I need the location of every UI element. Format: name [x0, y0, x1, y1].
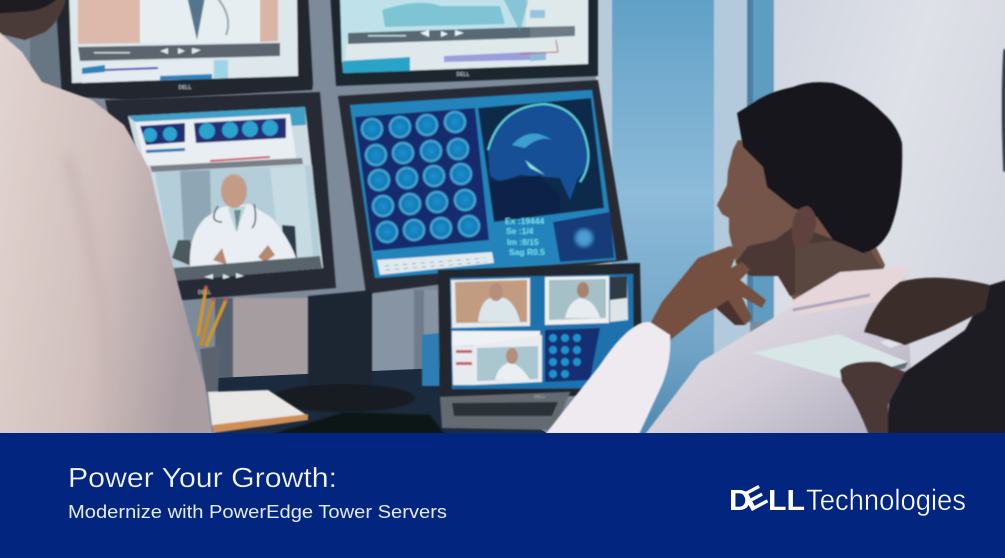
man in lab coat	[540, 82, 915, 441]
man: arm sleeve	[540, 322, 670, 441]
scan readout: Sag R0.5	[509, 247, 545, 257]
Dell Technologies logo: Technologies	[806, 484, 966, 517]
Dell Technologies logo	[729, 480, 966, 518]
banner	[0, 433, 1005, 558]
tablet	[752, 334, 908, 380]
back of head	[0, 0, 68, 40]
scan readout: Se :1/4	[506, 226, 534, 236]
scan readout	[505, 216, 545, 257]
Dell Technologies logo: LL	[768, 485, 805, 517]
man: ear	[792, 206, 816, 250]
man: hair	[737, 82, 902, 253]
top-right monitor	[330, 0, 598, 86]
scan readout: Ex :19444	[505, 216, 544, 226]
man: body coat	[640, 268, 915, 441]
photo: medical team at monitors	[0, 0, 1005, 441]
laptop label: DELL	[534, 394, 546, 399]
scan readout: Im :8/15	[507, 237, 539, 247]
desk items: cup, pencils, papers, keyboard	[198, 286, 450, 441]
lower hand	[840, 362, 905, 441]
background wall and window	[0, 0, 1005, 441]
monitor stand	[271, 290, 415, 412]
foreground person: tablet and hands	[752, 278, 1005, 441]
banner title: Power Your Growth:	[68, 462, 337, 493]
desk	[215, 368, 560, 441]
bezel label: DELL	[198, 290, 211, 296]
man: hand	[648, 246, 766, 342]
middle-left monitor with doctor video	[105, 92, 336, 300]
bezel label: DELL	[178, 85, 192, 91]
dark sleeve	[888, 278, 1005, 441]
laptop	[438, 263, 643, 430]
Dell Technologies logo: E	[738, 480, 773, 518]
upper hand	[864, 278, 990, 345]
MRI scan grid	[355, 108, 489, 251]
middle-right monitor with MRI scans	[338, 80, 628, 294]
banner subtitle: Modernize with PowerEdge Tower Servers	[68, 501, 447, 522]
white coat	[0, 26, 213, 441]
man: neck and face	[717, 140, 885, 310]
bezel label: DELL	[456, 72, 470, 78]
brain sagittal panel	[478, 98, 604, 222]
top-left monitor	[55, 0, 313, 100]
Dell Technologies logo: D	[729, 485, 751, 517]
foreground doctor seen from behind	[0, 0, 213, 441]
